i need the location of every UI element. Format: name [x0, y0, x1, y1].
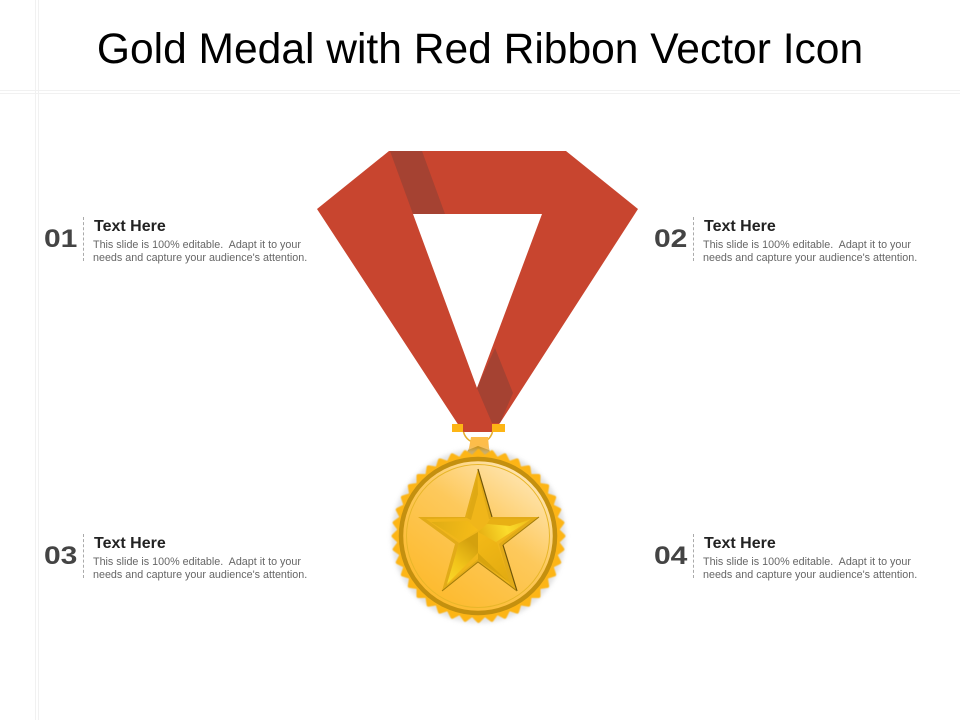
description [93, 239, 307, 264]
star [418, 469, 539, 591]
description [703, 556, 917, 581]
item 02 [654, 217, 917, 264]
outer dark ring [401, 459, 555, 613]
heading: Text Here [94, 218, 166, 235]
description: needs and capture your audience's attention. [93, 252, 307, 264]
medal clasp [452, 424, 505, 455]
number 04: 04 [654, 542, 687, 570]
title: Gold Medal with Red Ribbon Vector Icon [97, 25, 863, 73]
item 04 [654, 534, 917, 581]
number 03: 03 [44, 542, 77, 570]
description: needs and capture your audience's attention. [703, 252, 917, 264]
medal [391, 448, 566, 624]
ribbon fold shadow: top [390, 151, 445, 214]
description: This slide is 100% editable. Adapt it to your [93, 239, 301, 251]
number 02: 02 [654, 225, 687, 253]
description [93, 556, 307, 581]
serrated edge glow [392, 449, 566, 623]
description: This slide is 100% editable. Adapt it to your [703, 239, 911, 251]
item 03 [44, 534, 307, 581]
description [703, 239, 917, 264]
item 01 [44, 217, 307, 264]
star shadow edges [478, 469, 517, 591]
inner thin ring [406, 464, 550, 608]
ribbon [317, 151, 638, 432]
description: This slide is 100% editable. Adapt it to your [93, 556, 301, 568]
heading: Text Here [704, 535, 776, 552]
serrated gold edge [391, 448, 566, 624]
star facets [467, 476, 478, 520]
description: needs and capture your audience's attention. [703, 569, 917, 581]
heading: Text Here [94, 535, 166, 552]
description: needs and capture your audience's attention. [93, 569, 307, 581]
description: This slide is 100% editable. Adapt it to your [703, 556, 911, 568]
ribbon fold shadow: bottom [477, 348, 513, 423]
heading: Text Here [704, 218, 776, 235]
number 01: 01 [44, 225, 77, 253]
